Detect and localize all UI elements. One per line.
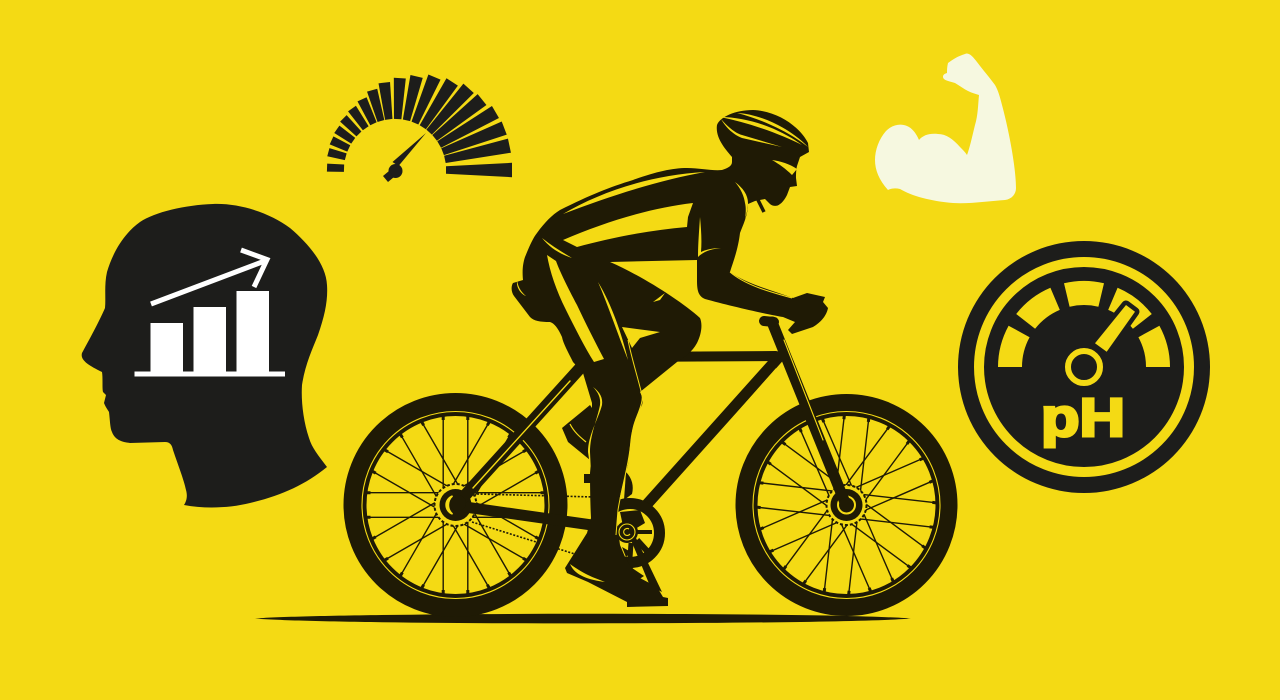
rider silhouette: [512, 110, 828, 607]
arrow: rising trend: [151, 250, 267, 304]
illustration: cyclist on bicycle: [355, 110, 946, 607]
icon: pH gauge: [958, 241, 1210, 493]
thin yellow contour lines: [616, 272, 792, 535]
chainring and crank: [600, 504, 662, 592]
icon: flexed arm muscle: [875, 54, 1016, 203]
shoe lace nubs: [622, 547, 644, 580]
helmet chin strap: [758, 200, 764, 212]
bicycle chain: [472, 494, 595, 555]
pH gauge scale arcs: [998, 281, 1170, 367]
pH gauge needle: [1068, 305, 1135, 383]
rider far leg and foot: [562, 405, 633, 500]
speedometer segments: [327, 74, 512, 177]
pH label: pH: [1041, 388, 1125, 448]
speedometer needle: [383, 133, 426, 182]
ground shadow: [255, 614, 911, 623]
icon: head with rising bar chart: [82, 204, 327, 507]
rider jersey, helmet and leg highlights: [517, 113, 808, 582]
rear wheel: [355, 404, 556, 606]
bar chart: [134, 291, 285, 376]
icon: speedometer: [327, 74, 512, 182]
bicycle frame: [450, 321, 854, 530]
front wheel: [746, 405, 946, 605]
